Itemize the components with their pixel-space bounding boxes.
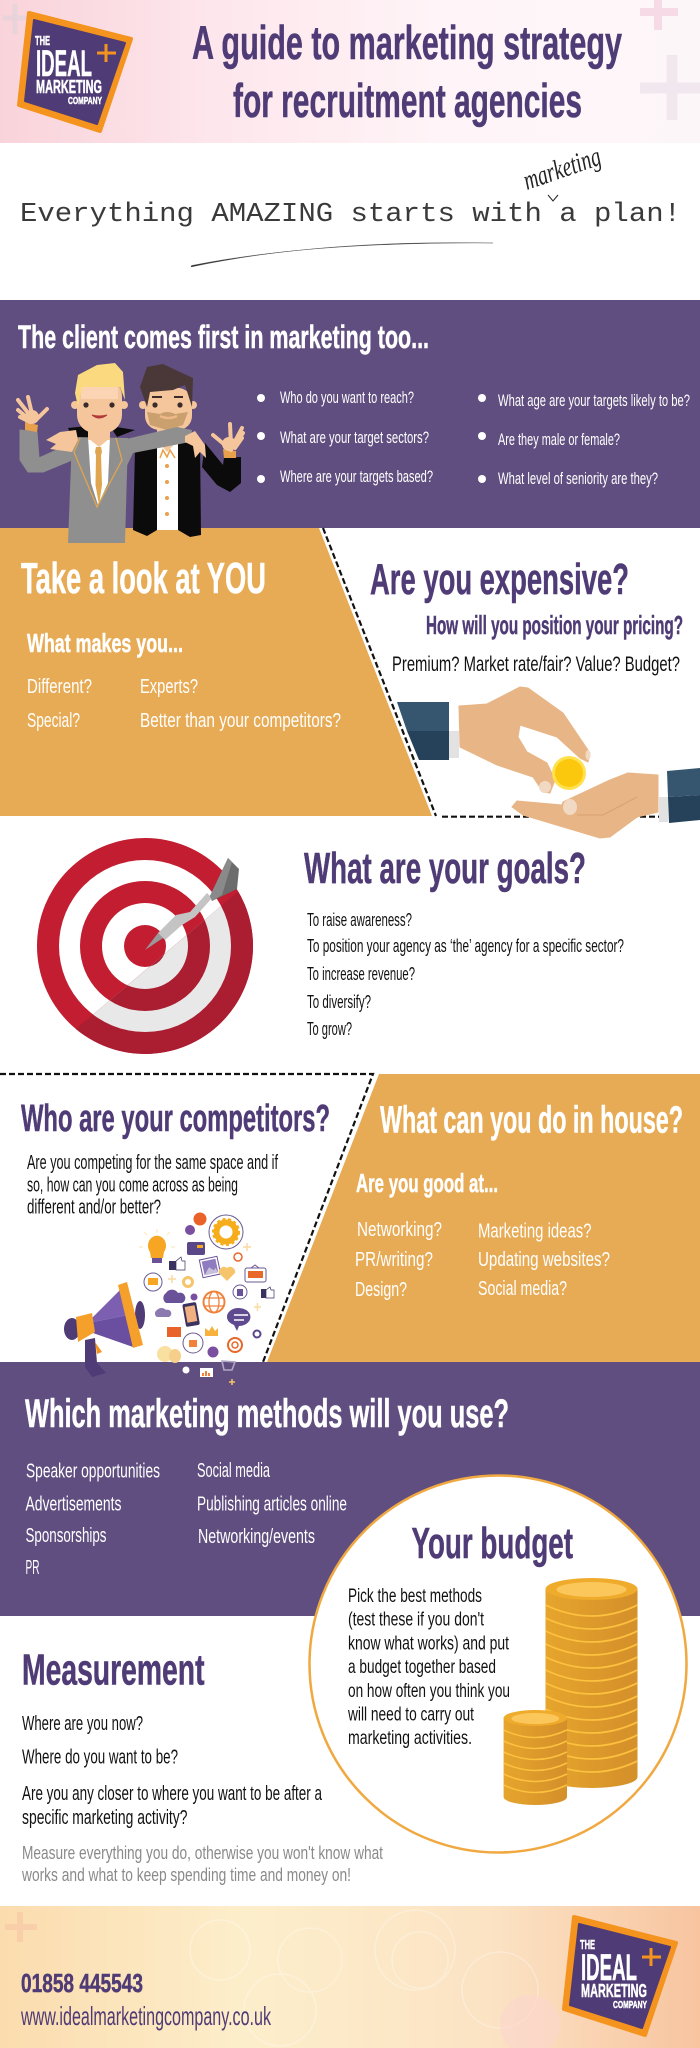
skills list: right: Updating websites?: [478, 1249, 610, 1271]
illustration: two businessmen: [18, 363, 243, 543]
handwritten insertion: marketing: marketing: [519, 141, 605, 197]
bullet list: right column: Are they male or female?: [498, 431, 620, 449]
hand-drawn underline: [191, 243, 493, 267]
goals list: To grow?: [307, 1019, 352, 1039]
logo: footer: COMPANY: [613, 2000, 647, 2011]
goals list: To diversify?: [307, 992, 371, 1012]
methods list: column two: Social media: [197, 1460, 271, 1482]
methods list: column one: [26, 1460, 160, 1579]
logo: The Ideal Marketing Company: THE: [35, 33, 50, 48]
skills list: right: [478, 1220, 610, 1300]
heading: your budget: Your budget: [412, 1519, 573, 1568]
list of qualities: Better than your competitors?: [140, 710, 341, 732]
icon cluster: social media and marketing symbols: [139, 1212, 274, 1385]
panel: footer: [0, 1906, 700, 2048]
logo: The Ideal Marketing Company: MARKETING: [36, 77, 102, 97]
contact phone: 01858 445543: [21, 1968, 143, 1998]
list of qualities: Special?: [27, 710, 80, 732]
icon: photo: [199, 1256, 221, 1278]
goals list: To raise awareness?: [307, 910, 412, 930]
bullet list: left column: [257, 389, 433, 486]
skills list: right: Marketing ideas?: [478, 1220, 592, 1242]
logo: footer: MARKETING: [581, 1981, 647, 2001]
skills list: left: [355, 1219, 442, 1301]
panel: your budget circle: [310, 1476, 686, 1852]
icon: radio: [187, 1242, 205, 1255]
panel: what are your goals: [37, 838, 624, 1054]
icon: globe: [204, 1292, 224, 1312]
bullet list: left column: What are your target sectors?: [280, 429, 429, 447]
skills list: left: Networking?: [357, 1219, 442, 1241]
budget paragraph: know what works) and put: [348, 1632, 509, 1654]
bullet list: left column: Where are your targets based?: [280, 468, 433, 486]
bullet list: left column: Who do you want to reach?: [280, 389, 414, 407]
measurement questions: specific marketing activity?: [22, 1807, 188, 1829]
caret mark: [548, 195, 558, 201]
competitors text: [27, 1152, 278, 1218]
panel: take a look at you: [0, 528, 432, 816]
icon: light bulb: [139, 1229, 175, 1263]
icon: thumb up: [169, 1257, 185, 1270]
budget paragraph: (test these if you don't: [348, 1608, 484, 1630]
panel: who are your competitors: [0, 1074, 373, 1385]
icon: chart: [233, 1285, 247, 1299]
logo: footer: [564, 1917, 676, 2035]
skills list: left: Design?: [355, 1279, 407, 1301]
budget paragraph: will need to carry out: [347, 1704, 474, 1726]
icon: thumb up small: [261, 1287, 274, 1298]
heading: client: The client comes first in marketing too...: [18, 319, 429, 355]
icon: large coin stack: [546, 1578, 638, 1788]
icon: megaphone: [64, 1282, 145, 1377]
icon: small coin stack: [504, 1710, 567, 1805]
title: [192, 16, 622, 127]
measurement note: [21, 1843, 383, 1885]
methods list: column one: Sponsorships: [26, 1525, 106, 1547]
panel: tagline: [20, 141, 681, 267]
list of qualities: Experts?: [140, 676, 198, 698]
icon: smartphone: [182, 1302, 200, 1327]
logo: The Ideal Marketing Company: COMPANY: [68, 96, 102, 107]
panel: header banner: [0, 0, 700, 143]
icon: cloud: [155, 1308, 171, 1317]
methods list: column one: PR: [26, 1557, 40, 1579]
budget paragraph: a budget together based: [348, 1656, 496, 1678]
illustration: hand passing coin: [397, 687, 700, 838]
logo: footer: IDEAL: [581, 1947, 637, 1988]
methods list: column one: Speaker opportunities: [26, 1460, 160, 1482]
budget paragraph: Pick the best methods: [348, 1585, 482, 1607]
methods list: column two: Publishing articles online: [197, 1494, 347, 1516]
subheading: what makes you: What makes you...: [27, 628, 183, 658]
logo: The Ideal Marketing Company: IDEAL: [36, 43, 92, 84]
methods list: column two: Networking/events: [198, 1526, 315, 1548]
tagline text: Everything AMAZING starts with a plan!: [20, 200, 681, 230]
panel: the client comes first: [0, 300, 700, 543]
panel: what can you do in house: [267, 1074, 700, 1362]
icon: cloud download: [163, 1290, 185, 1303]
measurement questions: [22, 1713, 323, 1829]
budget paragraph: marketing activities.: [348, 1727, 472, 1749]
competitors text: different and/or better?: [27, 1196, 161, 1218]
heading: measurement: Measurement: [22, 1646, 205, 1694]
list of qualities: [27, 676, 341, 732]
budget paragraph: [347, 1585, 510, 1749]
icon: gear: [209, 1215, 243, 1249]
skills list: right: Social media?: [478, 1278, 567, 1300]
competitors text: so, how can you come across as being: [27, 1174, 238, 1196]
panel: are you expensive: [323, 528, 700, 838]
methods list: column one: Advertisements: [26, 1494, 122, 1516]
panel: measurement: [21, 1646, 383, 1885]
list of qualities: Different?: [27, 676, 92, 698]
icon: target with dart: [37, 838, 253, 1054]
icon: speech bubble: [227, 1308, 250, 1331]
heading: take a look at you: Take a look at YOU: [21, 554, 266, 603]
goals list: [307, 910, 624, 1039]
subheading: are you good at: Are you good at...: [356, 1168, 498, 1198]
goals list: To increase revenue?: [307, 964, 415, 984]
measurement questions: Where are you now?: [22, 1713, 143, 1735]
competitors text: Are you competing for the same space and if: [27, 1152, 278, 1174]
logo: footer: THE: [580, 1937, 595, 1952]
logo: The Ideal Marketing Company: [19, 13, 131, 131]
measurement note: Measure everything you do, otherwise you won't know what: [22, 1843, 383, 1863]
measurement note: works and what to keep spending time and money on!: [21, 1865, 351, 1885]
budget paragraph: on how often you think you: [348, 1680, 510, 1702]
icon: heart: [219, 1267, 235, 1281]
skills list: left: PR/writing?: [355, 1249, 433, 1271]
contact website: www.idealmarketingcompany.co.uk: [20, 2001, 272, 2031]
measurement questions: Where do you want to be?: [22, 1746, 178, 1768]
methods list: column two: [197, 1460, 347, 1548]
measurement questions: Are you any closer to where you want to be after a: [22, 1783, 323, 1805]
heading: competitors: Who are your competitors?: [21, 1098, 330, 1140]
icon: television: [245, 1265, 266, 1282]
panel: which marketing methods: [0, 1362, 700, 1616]
bullet list: right column: [478, 392, 690, 488]
icon: mail: [144, 1273, 162, 1291]
